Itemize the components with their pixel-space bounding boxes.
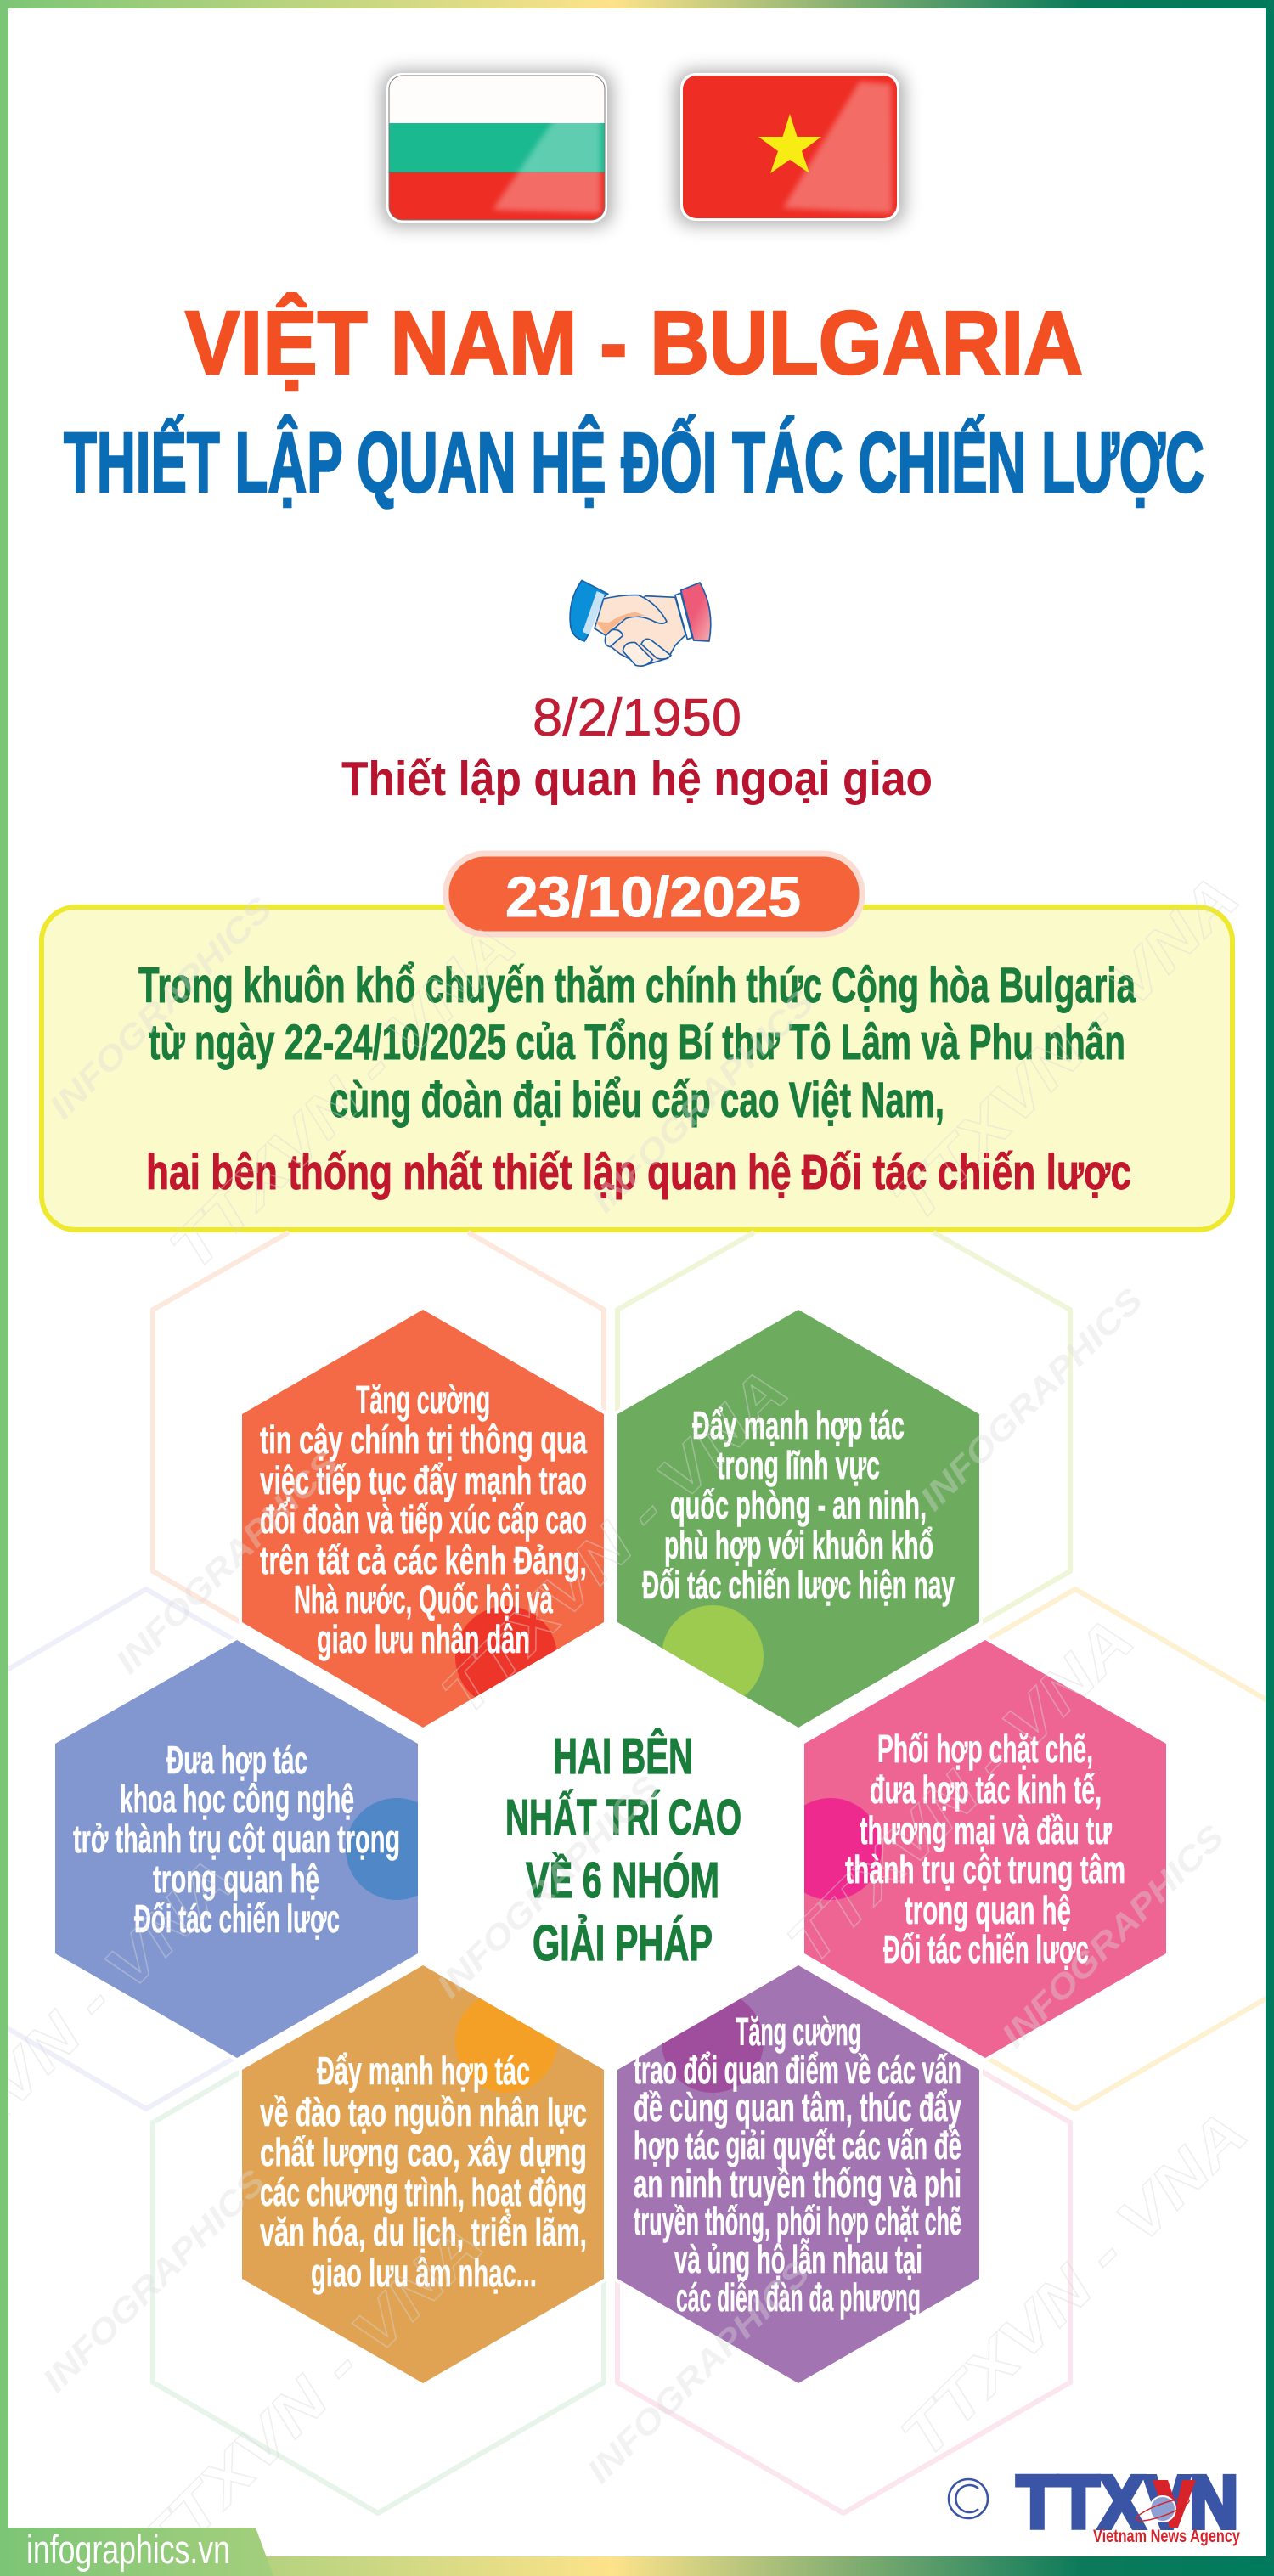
panel: hexagon - exchange of views: truyền thống, phối hợp chặt chẽ (634, 2199, 961, 2243)
panel: hexagon - exchange of views (617, 1965, 979, 2383)
watermark: INFOGRAPHICS (36, 2163, 273, 2399)
watermark: TTXVN - VNA (888, 2099, 1260, 2471)
watermark: TTXVN - VNA (880, 863, 1252, 1235)
watermark: TTXVN - VNA (775, 1605, 1147, 1977)
watermark: INFOGRAPHICS (42, 890, 279, 1126)
watermark: INFOGRAPHICS (109, 1445, 346, 1681)
panel: hexagon - political trust: đổi đoàn và tiếp xúc cấp cao (260, 1497, 587, 1542)
panel: hexagon - exchange of views: an ninh truyền thống và phi (634, 2162, 961, 2206)
icon: handshake (570, 580, 711, 666)
panel: hexagon - defence and security (617, 1310, 979, 1728)
summary text: cùng đoàn đại biểu cấp cao Việt Nam, (330, 1073, 944, 1128)
watermark: INFOGRAPHICS (584, 984, 821, 1220)
flag: Bulgaria (382, 71, 612, 226)
panel: hexagon - human resources and culture: về đào tạo nguồn nhân lực (260, 2090, 587, 2134)
watermark: INFOGRAPHICS (913, 1282, 1150, 1518)
panel: hexagon - science and technology: trong quan hệ (153, 1857, 319, 1901)
caption: Thiết lập quan hệ ngoại giao: Thiết lập quan hệ ngoại giao (341, 752, 933, 806)
panel: hexagon - science and technology: khoa học công nghệ (120, 1777, 354, 1821)
panel: hexagon - economy, trade and investment (780, 1640, 1166, 2058)
date badge: 23/10/2025 (446, 854, 862, 934)
panel: hexagon - exchange of views: và ủng hộ lẫn nhau tại (674, 2237, 922, 2281)
watermark: INFOGRAPHICS (995, 1818, 1232, 2055)
panel: hexagon - economy, trade and investment: thương mại và đầu tư (860, 1808, 1112, 1852)
panel: hexagon - political trust: tin cậy chính trị thông qua (260, 1418, 587, 1462)
panel: hexagon - defence and security: quốc phòng - an ninh, (670, 1483, 927, 1527)
watermark: TTXVN - VNA (124, 2210, 496, 2576)
panel: hexagon - political trust: giao lưu nhân dân (317, 1617, 530, 1661)
panel: hexagon - defence and security: Đối tác chiến lược hiện nay (642, 1563, 955, 1607)
panel: hexagon - exchange of views: các diễn đàn đa phương (676, 2275, 921, 2320)
panel: hexagon - human resources and culture: Đẩy mạnh hợp tác (317, 2049, 530, 2093)
panel: hexagon - economy, trade and investment: Đối tác chiến lược (883, 1927, 1089, 1971)
flag: Vietnam (676, 71, 904, 224)
date: 8/2/1950: 8/2/1950 (533, 689, 741, 747)
panel: hexagon - science and technology: Đưa hợp tác (166, 1738, 307, 1782)
panel: hexagon - political trust (242, 1310, 604, 1728)
panel: hexagon - human resources and culture: giao lưu âm nhạc... (311, 2251, 537, 2295)
center heading: six groups of solutions: HAI BÊN (553, 1728, 693, 1784)
panel: hexagon - exchange of views: trao đổi quan điểm về các vấn (634, 2048, 961, 2092)
panel: hexagon - defence and security: Đẩy mạnh hợp tác (692, 1403, 905, 1447)
panel: hexagon - exchange of views: đề cùng quan tâm, thúc đẩy (634, 2085, 961, 2129)
panel: hexagon - political trust: việc tiếp tục đẩy mạnh trao (260, 1458, 587, 1502)
panel: hexagon - human resources and culture: các chương trình, hoạt động (260, 2170, 587, 2214)
panel: hexagon - exchange of views: Tăng cường (736, 2010, 861, 2054)
title: Việt Nam - Bulgaria: VIỆT NAM - BULGARIA (185, 293, 1083, 393)
panel: hexagon - economy, trade and investment: đưa hợp tác kinh tế, (870, 1767, 1102, 1812)
footer tab: infographics.vn: infographics.vn (26, 2527, 230, 2572)
watermark: INFOGRAPHICS (430, 1769, 667, 2005)
watermark: INFOGRAPHICS (580, 2254, 817, 2490)
watermark: TTXVN - VNA (157, 911, 529, 1283)
panel: hexagon - economy, trade and investment: trong quan hệ (905, 1888, 1071, 1932)
watermark (0, 863, 1260, 2576)
panel: hexagon - human resources and culture: văn hóa, du lịch, triển lãm, (260, 2210, 587, 2254)
panel: hexagon - exchange of views: hợp tác giải quyết các vấn đề (634, 2123, 961, 2167)
center heading: six groups of solutions: GIẢI PHÁP (533, 1914, 713, 1971)
watermark: TTXVN - VNA (429, 1356, 801, 1728)
center heading: six groups of solutions: NHẤT TRÍ CAO (505, 1790, 741, 1846)
panel: hexagon - human resources and culture: chất lượng cao, xây dựng (260, 2130, 587, 2174)
panel: hexagon - economy, trade and investment: thành trụ cột trung tâm (845, 1847, 1125, 1891)
panel: hexagon - political trust: Nhà nước, Quốc hội và (294, 1577, 553, 1621)
panel: hexagon - political trust: trên tất cả các kênh Đảng, (260, 1538, 587, 1582)
panel: hexagon - science and technology: Đối tác chiến lược (134, 1897, 340, 1941)
summary text (138, 958, 1136, 1200)
panel: hexagon - defence and security: trong lĩnh vực (717, 1443, 880, 1487)
panel: summary box (42, 854, 1232, 1230)
center heading: six groups of solutions: VỀ 6 NHÓM (526, 1852, 719, 1908)
center heading: six groups of solutions (505, 1728, 741, 1971)
logo: TTXVN Vietnam News Agency: TTXVN (1017, 2461, 1238, 2544)
panel: hexagon - human resources and culture (242, 1965, 604, 2383)
panel: hexagon - economy, trade and investment: Phối hợp chặt chẽ, (877, 1727, 1093, 1771)
panel: hexagon - defence and security: phù hợp với khuôn khổ (664, 1523, 933, 1567)
logo: copyright symbol (949, 2479, 988, 2518)
panel: hexagon - science and technology: trở thành trụ cột quan trọng (73, 1817, 400, 1861)
panel: hexagon - political trust: Tăng cường (356, 1378, 490, 1422)
date badge: 23/10/2025: 23/10/2025 (505, 865, 801, 929)
panel: hexagon - science and technology (55, 1640, 448, 2058)
